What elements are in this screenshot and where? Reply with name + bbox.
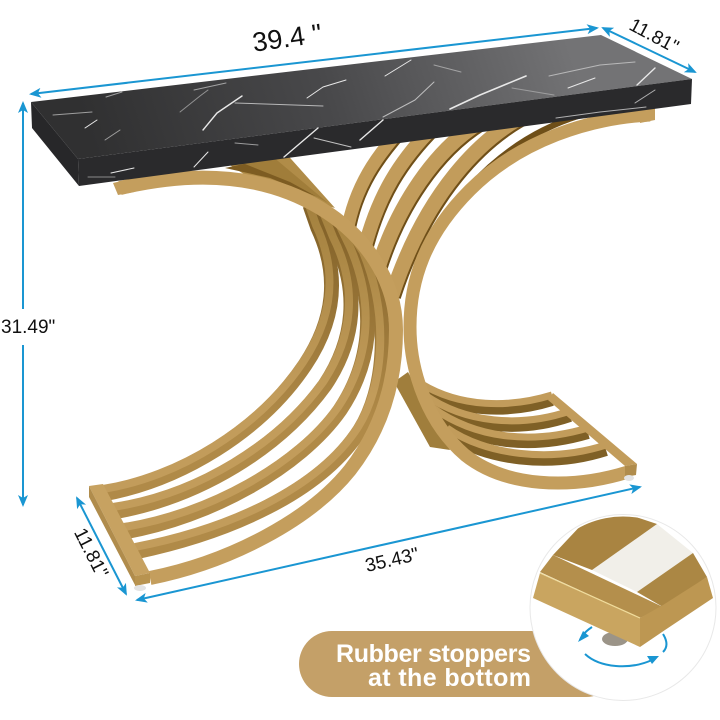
detail circle: rubber stopper close-up [530,514,716,701]
front leg [89,150,396,591]
dimension: table length: 39.4 " [251,18,324,58]
back leg outer arc [410,115,650,483]
front leg end tab [113,178,134,195]
fan of ribs above the arc [222,150,335,208]
back bar [553,516,657,570]
dimension: foot depth: 11.81" [69,525,112,582]
left edge [31,102,79,186]
dimension: base width: 35.43" [363,544,421,577]
back leg upper ribs [347,110,586,296]
dimension: height: 31.49" [1,317,55,338]
front foot bar [89,484,150,591]
stopper foot [602,632,628,646]
highlight edge [540,573,640,618]
side bar top [637,553,707,607]
front leg ribs [103,202,382,552]
front face [78,79,692,186]
back leg [347,108,655,483]
dimension: table depth: 11.81" [625,15,682,58]
dimension: foot depth [69,498,126,594]
rotation arrows [578,627,666,666]
frame end face [640,577,713,647]
frame front face [533,573,640,647]
callout text: at the bottom [368,664,531,692]
frame window [592,524,693,592]
marble table top [31,35,692,186]
top surface [31,35,692,159]
frame top surface [540,555,663,618]
dimension: table length [31,18,597,94]
dimension: table depth [603,15,695,72]
back leg lower ribs [420,383,606,460]
front leg outer arc [120,178,396,578]
white floor [530,510,720,710]
callout pill: rubber stoppers [299,631,619,697]
marble veins [53,60,655,177]
dimension: base width [137,487,640,600]
callout text: Rubber stoppers [336,640,531,668]
back foot bar [548,393,637,481]
back leg end tab [640,108,655,123]
crossing band behind arc [394,372,450,450]
